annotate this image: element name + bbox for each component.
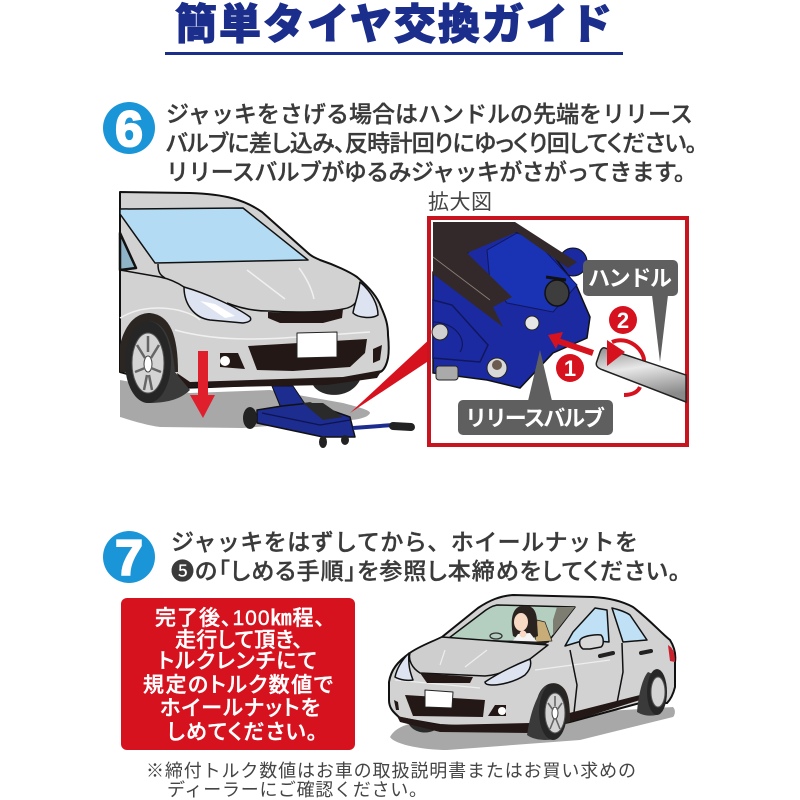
fog lamps bbox=[488, 705, 506, 716]
step 6 instructions: ジャッキをさげる場合はハンドルの先端をリリース bbox=[166, 101, 693, 127]
step 7 instructions bbox=[171, 529, 680, 584]
ground shadow bbox=[390, 707, 675, 750]
illustration: jacked-up car bbox=[120, 192, 411, 448]
callout wedge to the enlarged view bbox=[350, 336, 433, 413]
oil cap bbox=[545, 280, 569, 306]
footnote: ※締付トルク数値はお車の取扱説明書またはお買い求めの bbox=[146, 761, 636, 781]
label: release valve: リリースバルブ bbox=[465, 406, 605, 431]
red notice panel bbox=[121, 598, 355, 750]
skirt bbox=[397, 695, 640, 733]
right lobe bbox=[559, 248, 587, 276]
bracket bbox=[433, 300, 488, 362]
lower intake bbox=[405, 695, 485, 717]
licence plate bbox=[425, 690, 453, 708]
lower intake bbox=[248, 339, 367, 371]
red down arrow bbox=[190, 351, 215, 418]
step 7 number badge: 7 bbox=[115, 530, 143, 586]
red notice panel: 完了後、100㎞程、 bbox=[155, 607, 325, 630]
door lines bbox=[570, 643, 623, 722]
door handles bbox=[600, 651, 651, 656]
steering wheel bbox=[490, 633, 502, 639]
rotation arrow head bbox=[607, 340, 625, 366]
step 6 instructions: バルブに差し込み、反時計回りにゆっくり回してください。 bbox=[166, 130, 697, 156]
far wheel bbox=[408, 722, 442, 733]
licence plate bbox=[297, 332, 337, 358]
footnote bbox=[146, 761, 636, 800]
side window bbox=[120, 233, 136, 270]
title: 簡単タイヤ交換ガイド bbox=[175, 1, 612, 48]
left headlight bbox=[184, 287, 251, 323]
bolts bbox=[432, 324, 448, 340]
tail light bbox=[668, 645, 675, 662]
floor jack bbox=[257, 403, 355, 437]
dashboard bbox=[450, 639, 548, 646]
label: handle bbox=[583, 260, 678, 362]
step number 2: 2 bbox=[617, 308, 629, 333]
red notice panel: 走行して頂き、 bbox=[175, 629, 303, 652]
step 6 instructions bbox=[166, 101, 697, 185]
jack arm under the car bbox=[272, 386, 307, 413]
panel: enlarged view of release valve bbox=[429, 218, 687, 445]
headlights bbox=[485, 659, 531, 685]
red notice panel: 規定のトルク数値で bbox=[143, 674, 333, 697]
rotation arc behind tube bbox=[612, 340, 644, 362]
insertion arrow bbox=[555, 340, 593, 353]
mirror bbox=[580, 635, 603, 649]
fog lamps bbox=[220, 353, 245, 369]
label: release valve bbox=[458, 350, 613, 435]
driver bbox=[512, 606, 538, 642]
step 7 instructions: ジャッキをはずしてから、ホイールナットを bbox=[171, 529, 638, 555]
illustration: sedan with driver bbox=[389, 595, 675, 750]
red notice panel: ホイールナットを bbox=[160, 697, 320, 720]
far wheel bbox=[313, 380, 360, 395]
lower skirt bbox=[177, 370, 382, 387]
inner raised panel bbox=[487, 233, 577, 312]
red notice panel: トルクレンチにて bbox=[158, 650, 317, 673]
body bbox=[389, 595, 675, 730]
red notice panel: しめてください。 bbox=[167, 721, 317, 744]
handle tube bbox=[596, 348, 686, 402]
step number 1 bbox=[556, 354, 584, 382]
grille bbox=[420, 673, 473, 683]
step 6 number badge bbox=[103, 101, 155, 157]
front wheel arch bbox=[537, 683, 570, 730]
step number 1: 1 bbox=[564, 356, 576, 381]
front tyre bbox=[148, 321, 190, 403]
rear side window bbox=[612, 608, 647, 642]
jack body bbox=[433, 232, 590, 388]
label: handle: ハンドル bbox=[588, 266, 672, 291]
rotation arc in front of tube bbox=[624, 387, 640, 395]
wheel arch bbox=[120, 313, 178, 372]
step 6 instructions: リリースバルブがゆるみジャッキがさがってきます。 bbox=[166, 159, 697, 185]
step 7 instructions: ❺の「しめる手順」を参照し本締めをしてください。 bbox=[171, 558, 680, 584]
car body bbox=[120, 192, 389, 388]
hood lines bbox=[158, 264, 360, 312]
rear wheel bbox=[637, 672, 660, 716]
step 7 number badge bbox=[103, 530, 155, 586]
windshield bbox=[120, 208, 308, 263]
front wheel bbox=[527, 686, 558, 740]
hood and front line bbox=[409, 637, 548, 676]
footnote: ディーラーにご確認ください。 bbox=[167, 780, 427, 800]
step number 2 bbox=[609, 306, 637, 334]
enlarged view caption: 拡大図 bbox=[428, 191, 492, 214]
windshield bbox=[445, 605, 575, 642]
upper grille bbox=[268, 309, 343, 323]
seat bbox=[535, 620, 552, 642]
right headlight bbox=[353, 282, 378, 317]
front side window bbox=[565, 608, 609, 646]
ground shadow bbox=[120, 380, 370, 428]
black arm bbox=[433, 222, 577, 327]
interior pillar shade bbox=[553, 607, 575, 635]
step 6 number badge: 6 bbox=[115, 101, 143, 157]
